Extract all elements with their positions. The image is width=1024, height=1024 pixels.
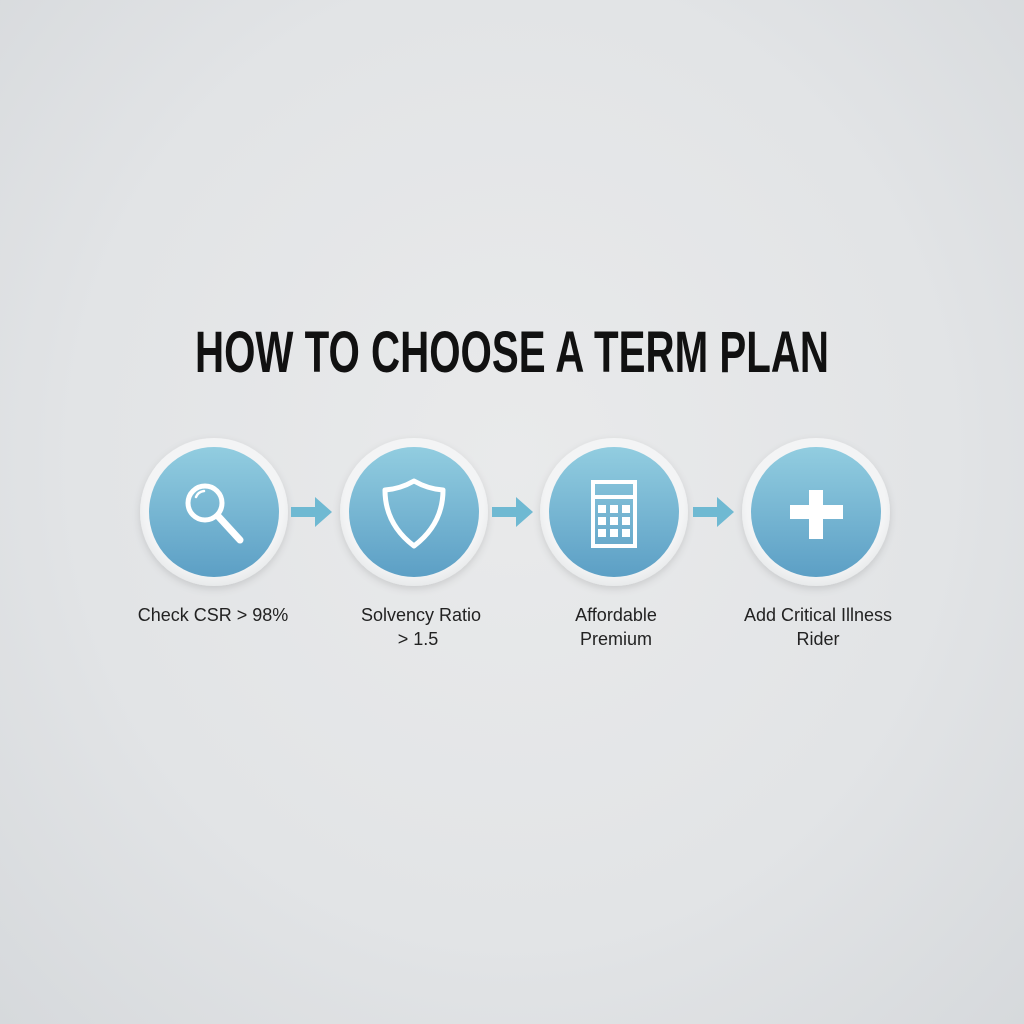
step 4: rider: Rider bbox=[796, 629, 840, 649]
icon: calculator bbox=[591, 480, 637, 548]
step 4: rider: Add Critical Illness bbox=[744, 605, 892, 625]
step 3: premium bbox=[540, 438, 688, 649]
step 2: solvency bbox=[340, 438, 488, 649]
arrow 2 bbox=[492, 497, 533, 527]
arrow 3 bbox=[693, 497, 734, 527]
step 4: rider bbox=[742, 438, 892, 649]
icon: shield bbox=[385, 481, 443, 546]
step 1: check CSR: Check CSR > 98% bbox=[138, 605, 288, 625]
icon: magnifier bbox=[188, 486, 240, 540]
step 2: solvency: Solvency Ratio bbox=[361, 605, 481, 625]
step 1: check CSR bbox=[138, 438, 288, 625]
step 3: premium: Affordable bbox=[575, 605, 657, 625]
icon: plus bbox=[790, 490, 843, 539]
step 3: premium: Premium bbox=[580, 629, 652, 649]
arrow 1 bbox=[291, 497, 332, 527]
step 2: solvency: > 1.5 bbox=[398, 629, 438, 649]
